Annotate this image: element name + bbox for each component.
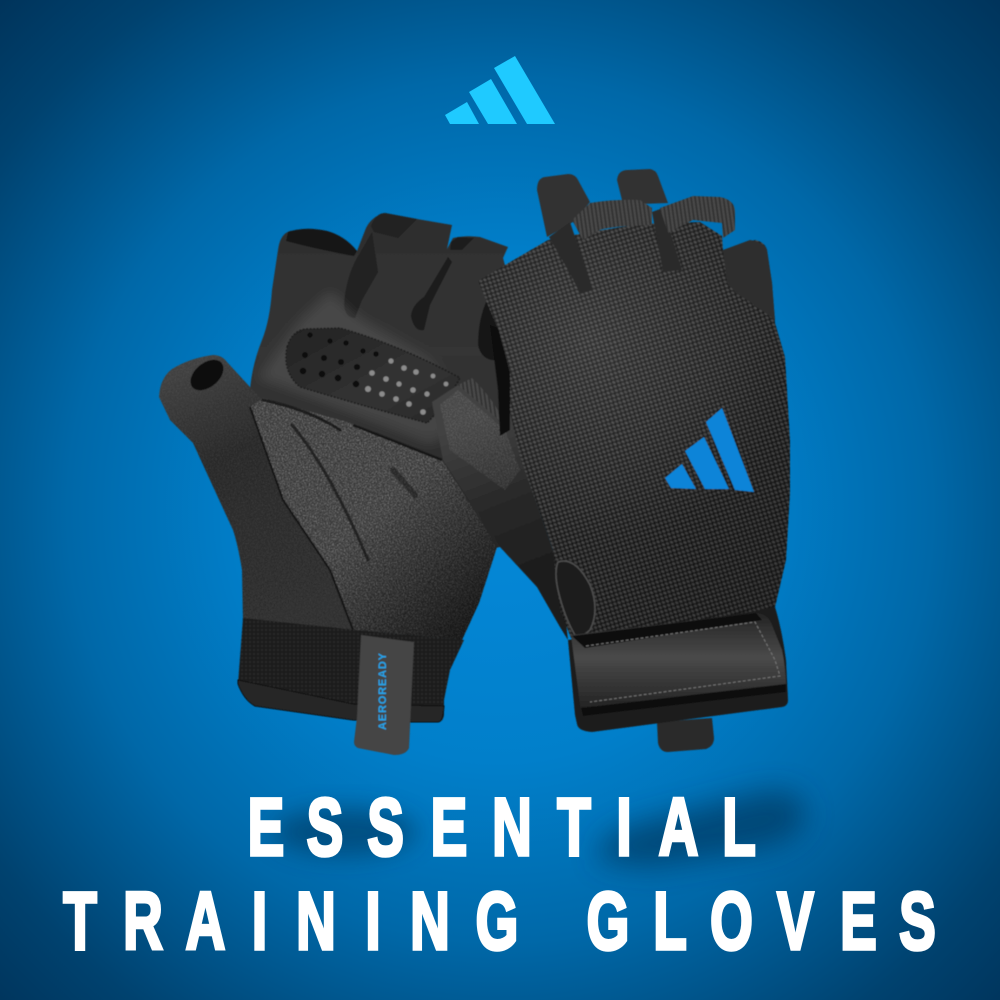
mesh panel folds — [263, 400, 415, 560]
bottom finger tab — [657, 718, 714, 752]
title shadow blobs — [273, 791, 806, 868]
thumb opening — [185, 354, 229, 396]
finger slit two — [411, 257, 452, 330]
finger opening: little finger knit — [286, 229, 357, 256]
thumb sleeve — [159, 355, 360, 632]
thumb-side suede — [432, 372, 568, 640]
palm knit: pocket near wrist side — [458, 378, 506, 436]
finger strip one — [549, 222, 593, 294]
strap gloss bottom — [581, 684, 786, 716]
wrist oval vent — [556, 561, 595, 640]
left glove: palm side — [159, 213, 520, 755]
gap shadow between gloves — [490, 325, 510, 436]
palm mesh panel speckle — [250, 398, 497, 640]
thumb seam — [250, 407, 353, 630]
thumb sleeve grain — [159, 355, 360, 632]
finger strip two — [652, 208, 682, 272]
title line two: TRAINING GLOVES — [63, 875, 936, 967]
finger tab two — [617, 169, 668, 204]
pull tab with label — [354, 635, 414, 755]
finger slit three — [478, 298, 512, 360]
palm light rim — [258, 290, 470, 445]
left wrist cuff — [238, 618, 464, 722]
perforated palm pad — [286, 328, 460, 423]
loop strap two — [660, 196, 735, 238]
suede grain — [440, 390, 520, 490]
finger opening: middle finger knit — [450, 237, 474, 250]
strap stitching — [586, 622, 780, 702]
wrist strap base — [568, 607, 788, 732]
mesh shading — [478, 222, 790, 638]
strap gloss top — [572, 613, 762, 648]
finger slit one — [344, 232, 378, 318]
mesh highlight — [478, 222, 790, 638]
palm seam strip — [353, 425, 442, 460]
back of hand mesh — [478, 222, 790, 638]
finger opening: ring finger knit — [371, 213, 417, 238]
mesh panel shading — [250, 398, 497, 640]
title line one: ESSENTIAL — [248, 781, 756, 873]
finger tab one — [537, 174, 590, 237]
loop strap one — [572, 200, 652, 240]
label: AEROREADY: AEROREADY — [377, 652, 389, 730]
title: ESSENTIAL TRAINING GLOVES — [63, 781, 936, 967]
finger strip three — [723, 240, 775, 320]
glove logo — [665, 408, 754, 492]
palm mesh panel base — [250, 398, 497, 640]
wrist strap velcro panel — [571, 613, 786, 712]
left glove palm and fingers — [250, 213, 520, 560]
right glove: back side — [432, 169, 790, 752]
product photo: pair of training gloves — [159, 169, 790, 755]
logo: three bars at top — [445, 56, 555, 124]
cuff hem band — [238, 680, 444, 722]
